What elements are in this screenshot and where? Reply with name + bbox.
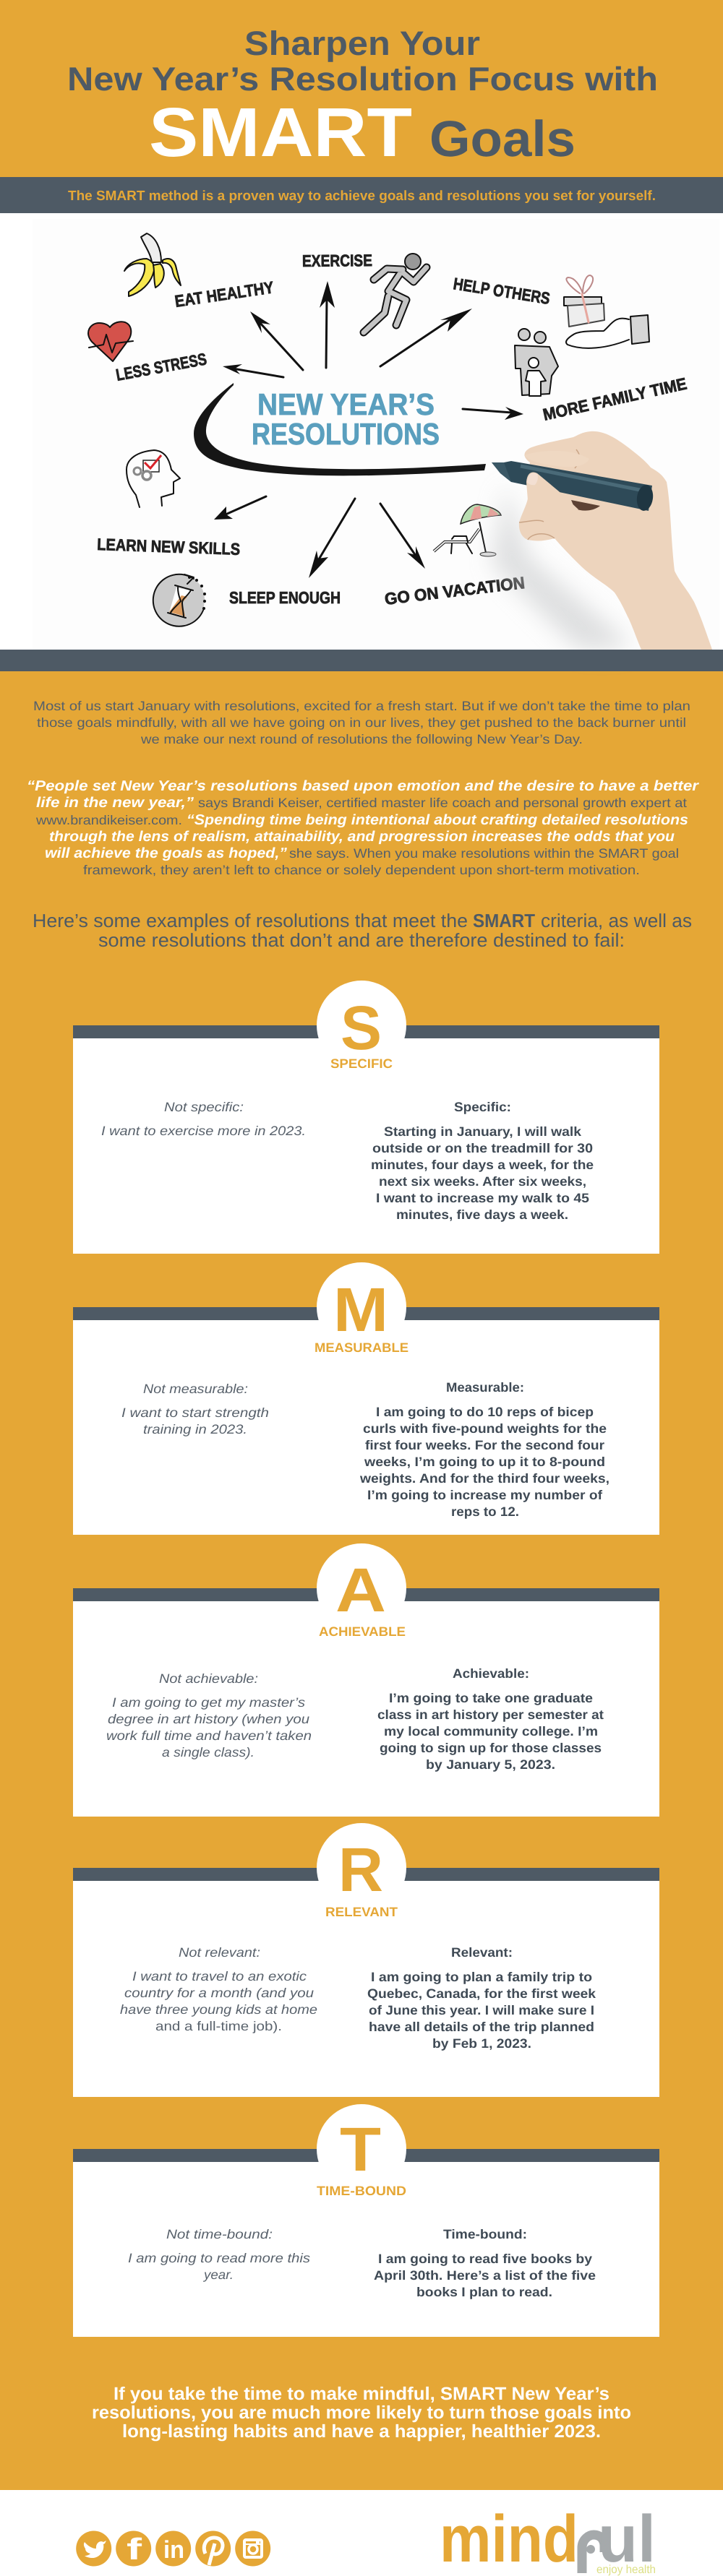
not measurable example: Not measurable: [143,1382,248,1396]
not achievable example: I am going to get my master’s [112,1695,305,1710]
measurable example: first four weeks. For the second four [365,1438,604,1452]
specific example: minutes, five days a week. [396,1207,568,1222]
achievable example: Achievable: [453,1666,529,1681]
expert quote paragraph: framework, they aren’t left to chance or solely dependent upon short-term motivation. [83,863,640,877]
centre title: new year's resolutions: RESOLUTIONS [252,417,440,451]
panel: relevant [73,1823,659,2097]
relevant example: have all details of the trip planned [369,2020,594,2034]
centre title: new year's resolutions: NEW YEAR’S [257,387,435,421]
logo: mindful enjoy health: mind [440,2502,578,2576]
label: learn new skills: LEARN NEW SKILLS [97,535,241,559]
expert quote paragraph: through the lens of realism, attainability, and progression increases the odds that you [49,829,675,845]
specific example: I want to increase my walk to 45 [376,1191,589,1205]
relevant example: Relevant: [451,1945,513,1960]
icon: banana [124,233,181,296]
thumb nail [527,473,538,485]
arrows [214,281,523,578]
specific example: minutes, four days a week, for the [371,1158,594,1172]
not achievable example [106,1671,312,1759]
heading: specific: SPECIFIC [330,1056,393,1071]
icon: linkedin: in [163,2536,184,2564]
relevant example: of June this year. I will make sure I [369,2003,594,2017]
time-bound example: I am going to read five books by [378,2252,592,2266]
finger creases [519,449,580,540]
measurable example: curls with five-pound weights for the [363,1421,607,1436]
letter M: M [333,1275,388,1345]
band below illustration [0,650,723,671]
closing statement: resolutions, you are much more likely to turn those goals into [92,2403,631,2423]
achievable example: my local community college. I’m [384,1724,598,1739]
icon: facebook [116,2530,151,2567]
panel: measurable [73,1262,659,1535]
letter T: T [340,2115,381,2184]
icon: head with checklist [127,450,180,507]
expert quote paragraph: “People set New Year’s resolutions based upon emotion and the desire to have a better [27,778,699,794]
not relevant example: Not relevant: [179,1945,260,1960]
heading: achievable: ACHIEVABLE [319,1624,406,1639]
relevant example: Quebec, Canada, for the first week [367,1986,596,2001]
not time-bound example: year. [202,2267,234,2282]
relevant example: I am going to plan a family trip to [371,1970,592,1984]
letter S: S [341,994,382,1063]
logo: mindful enjoy health: ul [598,2502,656,2576]
title: New Year’s Resolution Focus with [67,60,658,98]
specific example: outside or on the treadmill for 30 [372,1141,593,1155]
title: Goals [429,111,576,167]
not time-bound example [128,2227,310,2282]
section intro: SMART [473,910,535,931]
expert quote paragraph: life in the new year,” [36,795,194,811]
specific example: Specific: [454,1100,511,1114]
specific example: Starting in January, I will walk [384,1124,582,1139]
icon: hourglass [153,574,206,626]
not specific example: I want to exercise more in 2023. [101,1124,306,1138]
panel: time-bound [73,2104,659,2337]
not relevant example: have three young kids at home [120,2002,317,2017]
section intro: some resolutions that don’t and are therefore destined to fail: [98,929,625,951]
achievable example: by January 5, 2023. [426,1757,555,1772]
hand shadow [492,484,629,650]
not measurable example [121,1382,269,1436]
intro paragraph: we make our next round of resolutions the following New Year’s Day. [140,732,583,746]
specific example: next six weeks. After six weeks, [379,1174,586,1189]
icon: pinterest [195,2530,231,2567]
relevant example [367,1945,596,2051]
label: more family time: MORE FAMILY TIME [541,374,688,424]
label: less stress: LESS STRESS [114,349,208,384]
expert quote paragraph: she says. When you make resolutions within the SMART goal [289,846,679,861]
title: Sharpen Your [244,24,480,62]
label: go on vacation: GO ON VACATION [384,573,526,608]
relevant example: by Feb 1, 2023. [432,2036,531,2051]
closing statement [92,2384,631,2442]
expert quote paragraph: www.brandikeiser.com. [35,813,182,827]
icon: facebook: f [127,2532,143,2566]
footer [0,2490,723,2576]
marker stroke [194,383,486,475]
label: help others: HELP OTHERS [452,274,552,308]
measurable example: reps to 12. [451,1504,519,1519]
not measurable example: I want to start strength [121,1405,269,1420]
not time-bound example: I am going to read more this [128,2251,310,2265]
hero illustration: new year's resolutions whiteboard [0,213,723,650]
achievable example: going to sign up for those classes [380,1741,602,1755]
time-bound example: Time-bound: [443,2227,527,2241]
not achievable example: Not achievable: [159,1671,258,1686]
icon: twitter [76,2530,111,2567]
icon: heart with pulse [88,322,133,361]
time-bound example: books I plan to read. [416,2285,552,2299]
icon: linkedin [155,2530,191,2567]
heading: relevant: RELEVANT [325,1905,398,1919]
not relevant example: and a full-time job). [155,2019,282,2033]
icon: family [515,329,558,396]
centre title: new year's resolutions [252,387,440,451]
not time-bound example: Not time-bound: [166,2227,273,2241]
panel: specific [73,981,659,1254]
letter R: R [338,1835,383,1905]
time-bound example [374,2227,596,2299]
measurable example: weeks, I’m going to up it to 8-pound [364,1455,605,1469]
heading: time-bound: TIME-BOUND [317,2184,406,2198]
measurable example: weights. And for the third four weeks, [359,1471,609,1486]
shadow under marker [571,500,600,511]
not achievable example: work full time and haven’t taken [106,1728,312,1743]
title: SMART [149,94,412,171]
expert quote paragraph [27,778,699,877]
not measurable example: training in 2023. [143,1422,247,1436]
heading: measurable: MEASURABLE [315,1340,408,1355]
icon: beach umbrella and lounger [434,504,501,556]
not specific example: Not specific: [164,1100,244,1114]
index finger [524,451,589,467]
measurable example: I am going to do 10 reps of bicep [376,1405,594,1419]
icon: gift in hand [564,275,649,348]
not relevant example: country for a month (and you [124,1986,314,2000]
measurable example [359,1380,609,1519]
not relevant example: I want to travel to an exotic [132,1969,307,1983]
time-bound example: April 30th. Here’s a list of the five [374,2268,596,2283]
not relevant example [120,1945,317,2033]
expert quote paragraph: “Spending time being intentional about crafting detailed resolutions [187,812,688,828]
subtitle band: The SMART method is a proven way to achieve goals and resolutions you set for yourself. [68,189,656,204]
icon: instagram [235,2530,270,2567]
label: sleep enough: SLEEP ENOUGH [229,588,341,607]
not achievable example: a single class). [162,1745,254,1759]
expert quote paragraph: will achieve the goals as hoped,” [45,845,287,861]
intro paragraph: those goals mindfully, with all we have going on in our lives, they get pushed to the back burner until [37,715,686,730]
hand holding marker [492,431,712,650]
achievable example [377,1666,604,1772]
section intro: criteria, as well as [541,910,692,931]
section intro [33,910,692,951]
label: eat healthy: EAT HEALTHY [174,277,275,311]
closing statement: long-lasting habits and have a happier, healthier 2023. [122,2421,601,2442]
not achievable example: degree in art history (when you [108,1712,309,1726]
icon: runner [364,254,427,332]
not specific example [101,1100,306,1138]
title [67,24,658,171]
measurable example: I’m going to increase my number of [367,1488,603,1502]
marker pen [492,461,654,512]
thumb [526,473,578,520]
achievable example: I’m going to take one graduate [389,1691,593,1705]
letter A: A [335,1556,386,1625]
logo: mindful enjoy health: enjoy health [596,2564,656,2576]
subtitle band [0,177,723,213]
intro paragraph [33,699,690,746]
achievable example: class in art history per semester at [377,1707,604,1722]
label: exercise: EXERCISE [302,251,372,270]
measurable example: Measurable: [446,1380,524,1395]
intro paragraph: Most of us start January with resolutions, excited for a fresh start. But if we don’t take the time to plan [33,699,690,713]
closing statement: If you take the time to make mindful, SMART New Year’s [114,2384,609,2404]
panel: achievable [73,1543,659,1817]
specific example [371,1100,594,1222]
expert quote paragraph: says Brandi Keiser, certified master life coach and personal growth expert at [198,796,687,810]
section intro: Here’s some examples of resolutions that meet the [33,910,468,931]
